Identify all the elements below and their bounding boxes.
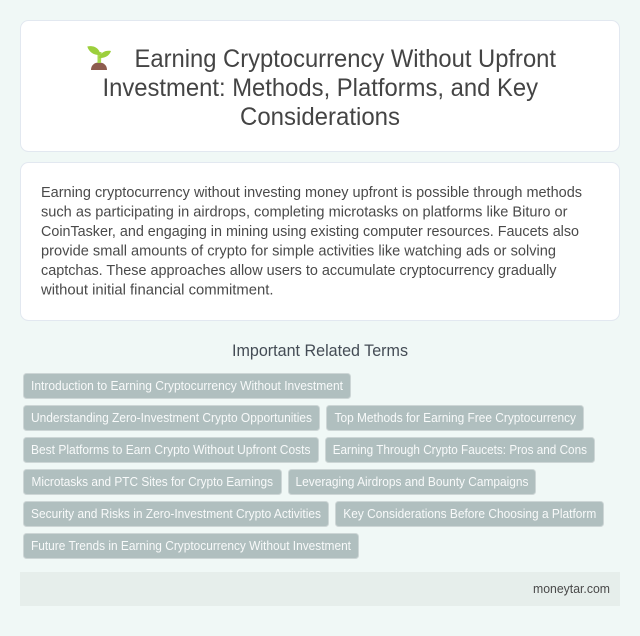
tag: introduction [24, 374, 350, 398]
tag: understanding [24, 406, 320, 430]
heading: title [102, 45, 556, 131]
tag: key considerations: Key Considerations Before Choosing a Platform [343, 506, 596, 521]
text block: description: captchas. These approaches allow users to accumulate cryptocurrency gradually [41, 262, 557, 279]
tag: future trends [24, 534, 358, 558]
tag: top methods [326, 406, 584, 430]
tag: key considerations [336, 502, 604, 526]
panel: footer [20, 572, 620, 606]
tag: airdrops: Leveraging Airdrops and Bounty Campaigns [296, 474, 528, 489]
tag: understanding: Understanding Zero-Investment Crypto Opportunities [31, 410, 312, 425]
tag: top methods: Top Methods for Earning Free Cryptocurrency [334, 410, 577, 425]
tag: future trends: Future Trends in Earning Cryptocurrency Without Investment [31, 538, 351, 553]
text block: description: Earning cryptocurrency without investing money upfront is possible through methods [41, 184, 582, 201]
text block: description: without initial financial commitment. [40, 282, 274, 298]
heading: title: Considerations [240, 103, 400, 131]
text block: description: CoinTasker, and engaging in mining using existing computer resources. Faucets also [41, 223, 579, 240]
tag: airdrops [288, 470, 536, 494]
tag: security: Security and Risks in Zero-Investment Crypto Activities [31, 506, 321, 521]
tag: best platforms [24, 438, 318, 462]
tag: security [24, 502, 328, 526]
text block: description [40, 184, 582, 298]
text block: description: such as participating in airdrops, completing microtasks on platforms like Bituro or [41, 204, 568, 220]
text block: description: provide small amounts of crypto for simple activities like watching ads or solving [41, 242, 556, 260]
tag: faucets: Earning Through Crypto Faucets: Pros and Cons [333, 442, 587, 457]
panel: title card [20, 20, 620, 152]
tag: introduction: Introduction to Earning Cryptocurrency Without Investment [31, 378, 343, 393]
icon: seedling [87, 46, 111, 70]
tag: microtasks [24, 470, 282, 494]
tag: microtasks: Microtasks and PTC Sites for Crypto Earnings [32, 474, 273, 489]
text: source: moneytar.com [533, 582, 610, 596]
tag: best platforms: Best Platforms to Earn Crypto Without Upfront Costs [31, 442, 310, 457]
panel: related term tags [24, 374, 604, 558]
panel: description card [20, 162, 620, 320]
heading: title: Earning Cryptocurrency Without Upfront [134, 45, 556, 73]
heading: important related terms: Important Related Terms [232, 342, 408, 360]
tag: faucets [326, 438, 594, 462]
heading: title: Investment: Methods, Platforms, and Key [102, 74, 538, 102]
